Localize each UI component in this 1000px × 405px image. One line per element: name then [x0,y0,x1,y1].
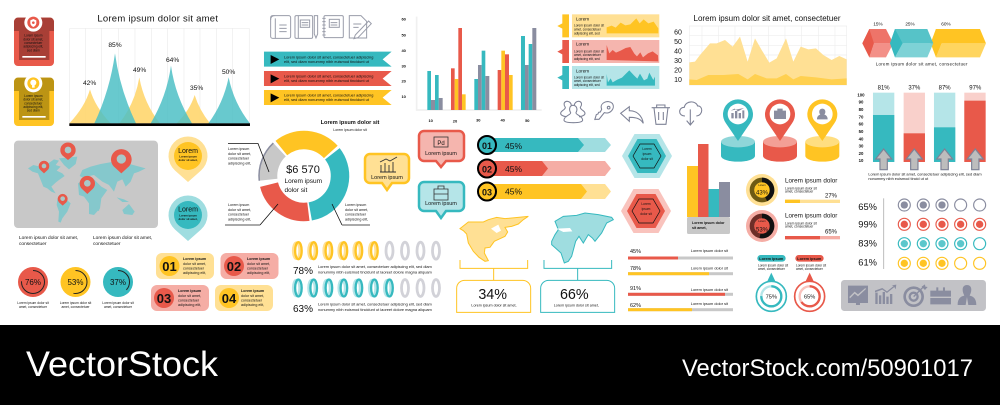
gauge: 43%: Lorem ipsum dolor sit [785,186,817,190]
ring pictogram: 78%: 78% [293,266,313,277]
chart: stacked bars with arrows: 81% [878,86,890,92]
gauges: percentage circles: amet, consectetuer [104,305,133,309]
bubble: yellow: Lorem ipsum [179,154,197,158]
chart: stacked bars with arrows: 40 [859,136,864,141]
gauge: 37%: 37% [110,278,126,287]
donut chart: $6 570 [286,164,320,176]
chart: stacked bars with arrows: 50 [859,129,864,134]
panel: world map with pins [14,141,158,228]
gauge: 43%: Lorem [758,183,767,187]
card: yellow: consectetuer [24,101,42,105]
hexagon: red: ipsum [642,207,651,211]
card 01: consectetuer [183,266,205,270]
bubble: teal: Lorem [178,206,198,214]
chart: peak area chart: 35% [190,85,203,92]
chart: stacked bars with arrows: 20 [859,151,864,156]
chart: stacked bars with arrows: 10 [859,158,864,163]
card 04: adipiscing elit, [241,303,264,307]
gauge: 43%: Lorem ipsum dolor [785,177,837,184]
pin: yellow person [805,99,839,162]
footer band [0,325,1000,405]
donut heading: Lorem ipsum dolor sit [333,128,367,132]
map captions: Lorem ipsum dolor sit amet, [93,235,152,241]
chart: stacked bars with arrows: 37% [908,86,921,92]
bubble: yellow: Lorem [178,148,198,155]
chart: area chart: 10 [674,77,682,84]
card: red: adipiscing elit, [23,45,43,49]
ribbon: yellow: elit, sed diam nonummy nibh euismod tincidunt ut [284,97,370,102]
donut chart: Lorem ipsum [284,178,322,185]
progress bars [628,248,733,311]
chart: grouped bar chart: 10 [428,118,434,123]
card 03: dolor sit amet, [178,294,201,298]
arrow bar 03: 45% [505,186,522,196]
numbered cards [151,253,278,311]
callout: red presentation: Pd [437,141,445,147]
chart: mini column chart: sit amet, [692,226,707,230]
ring pictogram: 63%: 63% [293,304,313,315]
gauge: 53%: Lorem [758,219,767,223]
gauge: 43%: 43% [756,190,769,196]
donut chart: adipiscing elit, [345,218,368,222]
chart: stacked bars with arrows: 60 [859,122,864,127]
dial: 75% [756,255,788,311]
chart title: Lorem ipsum dolor sit amet [97,14,218,25]
donut chart: consectetuer [228,156,250,160]
panel: red and yellow cards [14,14,54,126]
card 03: 03 [157,291,171,306]
ribbon: red: elit, sed diam nonummy nibh euismod tincidunt ut [284,78,370,83]
dots row: teal [898,238,986,250]
gauges: percentage circles: Lorem ipsum dolor sit [60,301,91,305]
icon: monitor [848,286,868,305]
donut chart: consectetuer [345,212,367,216]
card 03 [151,285,209,311]
gauge: 76%: 76% [25,278,41,287]
card 01: 01 [162,259,177,274]
hexagon: teal: dolor sit [641,157,653,161]
chart: area chart: 20 [674,68,682,74]
dial: 65% [795,255,826,311]
chart: grouped bar chart: 20 [453,119,458,124]
card 02: consectetuer [247,266,269,270]
card 04: dolor sit amet, [241,294,264,298]
chart: area chart: 50 [674,39,682,46]
gauges: percentage circles: amet, consectetuer [19,305,48,309]
gauge: 53% [746,210,840,242]
callout: red presentation: Lorem ipsum [425,151,457,157]
dial: 75%: 75% [766,294,777,300]
donut chart: adipiscing elit, [228,162,251,166]
progress bars: Lorem ipsum dolor sit [691,266,729,270]
card: yellow: dolor sit amet, [23,98,43,102]
area chart title: Lorem ipsum dolor sit amet, consectetuer [694,14,841,23]
card 04: Lorem ipsum [241,289,265,293]
card: red: sed diam [27,48,40,52]
card 01 [156,253,214,279]
bubble: teal: dolor sit amet, [178,217,198,221]
callout: yellow chart: Lorem ipsum [371,175,403,181]
donut heading [321,120,380,132]
callout: red presentation [419,131,464,167]
card 01: adipiscing elit, [183,271,206,275]
callout: teal briefcase: Lorem ipsum [425,201,457,207]
mini card: teal: Lorem [576,69,589,74]
chart: grouped bar chart [401,16,542,124]
chart: stacked bars with arrows: 90 [859,100,864,105]
dial: 65%: Lorem ipsum [797,257,822,261]
icon: target [905,284,928,306]
dot rating matrix: 99% [858,220,877,230]
card: yellow: sed diam [27,109,40,113]
dial: 75%: amet, consectetuer [758,267,785,271]
percentage boxes [457,260,615,312]
progress bars: 45% [630,249,641,255]
donut chart: Lorem ipsum [345,203,366,207]
map: Europe Africa Asia [552,213,613,263]
ring pictogram: 78% [293,242,440,277]
box: 66%: 66% [560,287,589,303]
box: 34%: 34% [478,287,507,303]
chart: mini column chart [687,144,730,234]
donut chart: adipiscing elit, [228,218,251,222]
arrow bar 03: 03 [482,188,492,198]
arrow bar 01: 45% [505,141,522,151]
callouts [365,131,464,218]
hexagon: red: dolor sit [640,212,652,216]
mini card: teal: Lorem ipsum dolor sit [574,75,604,79]
world map [28,157,146,223]
chart: grouped bar chart: 40 [500,118,506,123]
donut chart: consectetuer [228,212,250,216]
gauges with bars [746,174,840,311]
box: 66% [541,260,615,312]
card 02 [220,253,278,279]
arrow bar 02: 45% [505,164,522,174]
map captions: Lorem ipsum dolor sit amet, [19,235,78,241]
chart: stacked bars with arrows: 87% [939,86,951,92]
progress bars: 91% [630,286,641,292]
bubble: teal: Lorem ipsum [179,214,197,218]
mini card: red: amet, consectetuer [574,53,601,57]
donut chart [225,120,380,227]
chart: grouped bar chart: 50 [525,118,530,123]
icons: books and notes [271,16,371,39]
mini card: teal: amet, consectetuer [574,79,601,83]
card 02: dolor sit amet, [247,262,270,266]
chart: mini column chart: Lorem ipsum dolor [692,221,725,225]
gauge: 53%: 53% [756,228,769,234]
hexagon: teal: Lorem [642,147,652,151]
pins on cylinders [721,99,839,162]
icons: people, key, arrow, trash, cloud [561,101,702,125]
chart: hexagon process: Lorem ipsum dolor sit amet, consectetuer [876,62,968,67]
dot rating matrix: 61% [858,258,877,268]
hexagon badges [621,134,672,233]
mini card: teal [557,66,659,89]
card: red: consectetuer [24,41,42,45]
ribbon: red [264,71,392,86]
map captions: consectetuer [19,241,47,247]
chart: stacked bars with arrows [857,86,986,181]
chart: stacked bars with arrows: Lorem ipsum dolor sit amet, consectetuer adipiscing elit, sed diam [868,172,982,177]
gauge: 53%: Lorem ipsum dolor sit [785,221,817,225]
chart: hexagon process: 25% [905,22,915,27]
donut chart: Lorem ipsum [228,203,249,207]
progress bars: Lorem ipsum dolor sit [691,301,729,306]
card 04 [215,285,273,311]
chart: hexagon process: 15% [873,22,883,27]
mini card: yellow: Lorem ipsum dolor sit [574,24,604,28]
donut chart: dolor sit amet, [345,208,368,212]
gauges: percentage circles [17,267,134,309]
progress bars: 62% [630,303,641,309]
card 01: dolor sit amet, [183,262,206,266]
hexagon: red [621,189,671,233]
chart: stacked bars with arrows: 100 [857,92,865,97]
box: 34% [457,260,531,312]
chart: area chart [674,14,847,85]
gauge: 43%: 27% [825,193,838,199]
chart: hexagon process [862,22,986,67]
bubble: yellow [168,136,207,182]
progress bars: Lorem ipsum dolor sit [691,287,729,292]
progress bars: Lorem ipsum dolor sit [691,248,729,253]
pin: red briefcase [763,99,797,162]
card 04: consectetuer [241,298,263,302]
ring pictogram: 63%: Lorem ipsum dolor sit amet, consectetuer adipiscing elit, sed diam [318,302,432,306]
chart: grouped bar chart: 60 [401,16,407,21]
donut chart: dolor sit amet, [228,152,251,156]
gauges: percentage circles: Lorem ipsum dolor sit [17,301,49,305]
chart: peak area chart: 64% [166,57,179,64]
card 02: 02 [227,259,241,274]
mini card: red: Lorem [576,42,589,47]
mini card: yellow: Lorem [576,17,589,22]
mini card: red [557,40,659,63]
location bubbles [168,136,207,241]
mini card: yellow [557,14,659,37]
card 02: Lorem ipsum [247,257,271,261]
ribbon: yellow: Lorem ipsum dolor sit amet, consectetuer adipiscing [284,92,373,97]
dial: 75%: Lorem ipsum dolor sit [758,264,788,268]
mini card: red: Lorem ipsum dolor sit [574,49,604,53]
card 03: adipiscing elit, [178,303,201,307]
pin: teal chart [721,99,755,162]
chart: peak area chart: 50% [222,69,235,76]
mini card: red: adipiscing elit, sed [574,57,600,61]
card 04: 04 [222,291,237,306]
card 03: consectetuer [178,298,200,302]
chart: hexagon process: 60% [941,22,951,27]
icon: bar chart [875,285,896,304]
progress bars: 78% [630,266,641,272]
ribbon: teal: Lorem ipsum dolor sit amet, consectetuer adipiscing [284,54,373,59]
chart: peak area chart: 85% [108,42,122,49]
panel: mini area cards [557,14,659,89]
chart: stacked bars with arrows: nonummy nibh euismod tincid ut ut [868,176,929,181]
mini card: yellow: amet, consectetuer [574,27,601,31]
arrow bar 02 [478,160,611,178]
map pins [39,143,132,206]
chart: stacked bars with arrows: 30 [859,144,864,149]
bubble: teal [168,195,207,241]
ring pictogram: 63%: nonummy nibh euismod tincidunt ut laoreet dolore magna aliquam [318,307,432,312]
arrow bar 01 [478,136,611,154]
dots row: grey [898,199,986,211]
donut chart: dolor sit amet, [228,208,251,212]
dial: 65%: amet, consectetuer [796,267,823,271]
map captions [19,235,152,247]
donut chart: dolor sit [284,187,307,194]
footer url: VectorStock.com/50901017 [682,355,973,382]
ribbon: yellow [264,90,392,105]
chart: area chart: 30 [674,58,682,65]
dot rating matrix [858,198,986,269]
gauge: 53%: amet, consectetuer [785,225,814,229]
bubble: yellow: dolor sit amet, [178,158,198,162]
panel: business icons [841,280,986,311]
chart: area chart: 40 [674,48,682,56]
numbered arrow bars [478,136,611,200]
chart: peak area chart: 49% [133,67,146,74]
card: red [14,14,54,66]
gauges: percentage circles: Lorem ipsum dolor sit [102,301,134,305]
dial: 75%: Lorem ipsum [759,257,784,261]
dots row: yellow [898,257,986,269]
arrow bar 03 [478,182,611,200]
donut chart: Lorem ipsum [228,147,249,151]
mini card: teal: adipiscing elit, sed [574,83,600,87]
gauge: 53%: Lorem ipsum dolor [785,212,837,219]
mini card: yellow: adipiscing elit, sed [574,31,600,35]
footer logo: VectorStock [26,345,219,384]
card: yellow: Lorem ipsum [24,94,43,98]
arrow bar 01: 01 [482,141,492,151]
card: yellow: adipiscing elit, [23,105,43,109]
box: 34%: Lorem ipsum dolor sit amet, [471,303,517,307]
icon: briefcase [930,287,951,304]
icon: businessman [958,285,976,305]
dial: 65%: Lorem ipsum dolor sit [796,264,826,268]
chart: grouped bar chart: 10 [401,94,407,99]
gauge: 43%: amet, consectetuer [785,190,814,194]
card 02: adipiscing elit, [247,271,270,275]
ribbon: teal [264,52,392,67]
card: red: Lorem ipsum [24,34,43,38]
map captions: consectetuer [93,241,121,247]
chart: grouped bar chart: 30 [401,63,407,68]
chart: grouped bar chart: 40 [401,48,407,53]
dots row: red [898,218,986,230]
ribbon: red: Lorem ipsum dolor sit amet, consectetuer adipiscing [284,73,373,78]
ring pictogram: 63% [293,280,440,315]
card: yellow [14,74,54,126]
box: 66%: Lorem ipsum dolor sit amet, [554,303,599,307]
ribbons [264,52,392,105]
ring pictogram: 78%: Lorem ipsum dolor sit amet, consectetuer adipiscing elit, sed diam [318,264,432,269]
gauge: 43% [746,174,840,206]
card 03: Lorem ipsum [178,289,202,293]
chart: grouped bar chart: 20 [401,79,407,84]
gauge: 53%: 53% [67,278,84,287]
card 01: Lorem ipsum [183,257,207,261]
dot rating matrix: 83% [858,239,877,249]
hexagon: red: Lorem [641,202,651,206]
ring pictogram: 78%: nonummy nibh euismod tincidunt ut laoreet dolore magna aliquam [318,270,432,274]
dial: 65%: 65% [804,294,815,300]
ribbon: teal: elit, sed diam nonummy nibh euismod tincidunt ut [284,59,370,64]
dot rating matrix: 65% [858,202,877,212]
arrow bar 02: 02 [482,164,492,174]
chart: area chart: 60 [674,30,682,36]
chart: peak area chart [69,14,250,126]
card: red: dolor sit amet, [23,37,43,41]
chart: stacked bars with arrows: 80 [859,107,864,112]
donut heading: Lorem ipsum dolor sit [321,120,380,126]
chart: peak area chart: 42% [83,80,96,87]
chart: stacked bars with arrows: 97% [969,86,982,92]
gauges: percentage circles: amet, consectetuer [61,305,90,309]
gauge: 53%: 65% [825,229,838,235]
hexagon: teal: ipsum [643,152,652,156]
map: North America [460,216,528,261]
chart: stacked bars with arrows: 70 [859,114,864,119]
chart: grouped bar chart: 30 [476,117,481,122]
hexagon: teal [622,134,672,178]
chart: grouped bar chart: 50 [401,33,407,38]
